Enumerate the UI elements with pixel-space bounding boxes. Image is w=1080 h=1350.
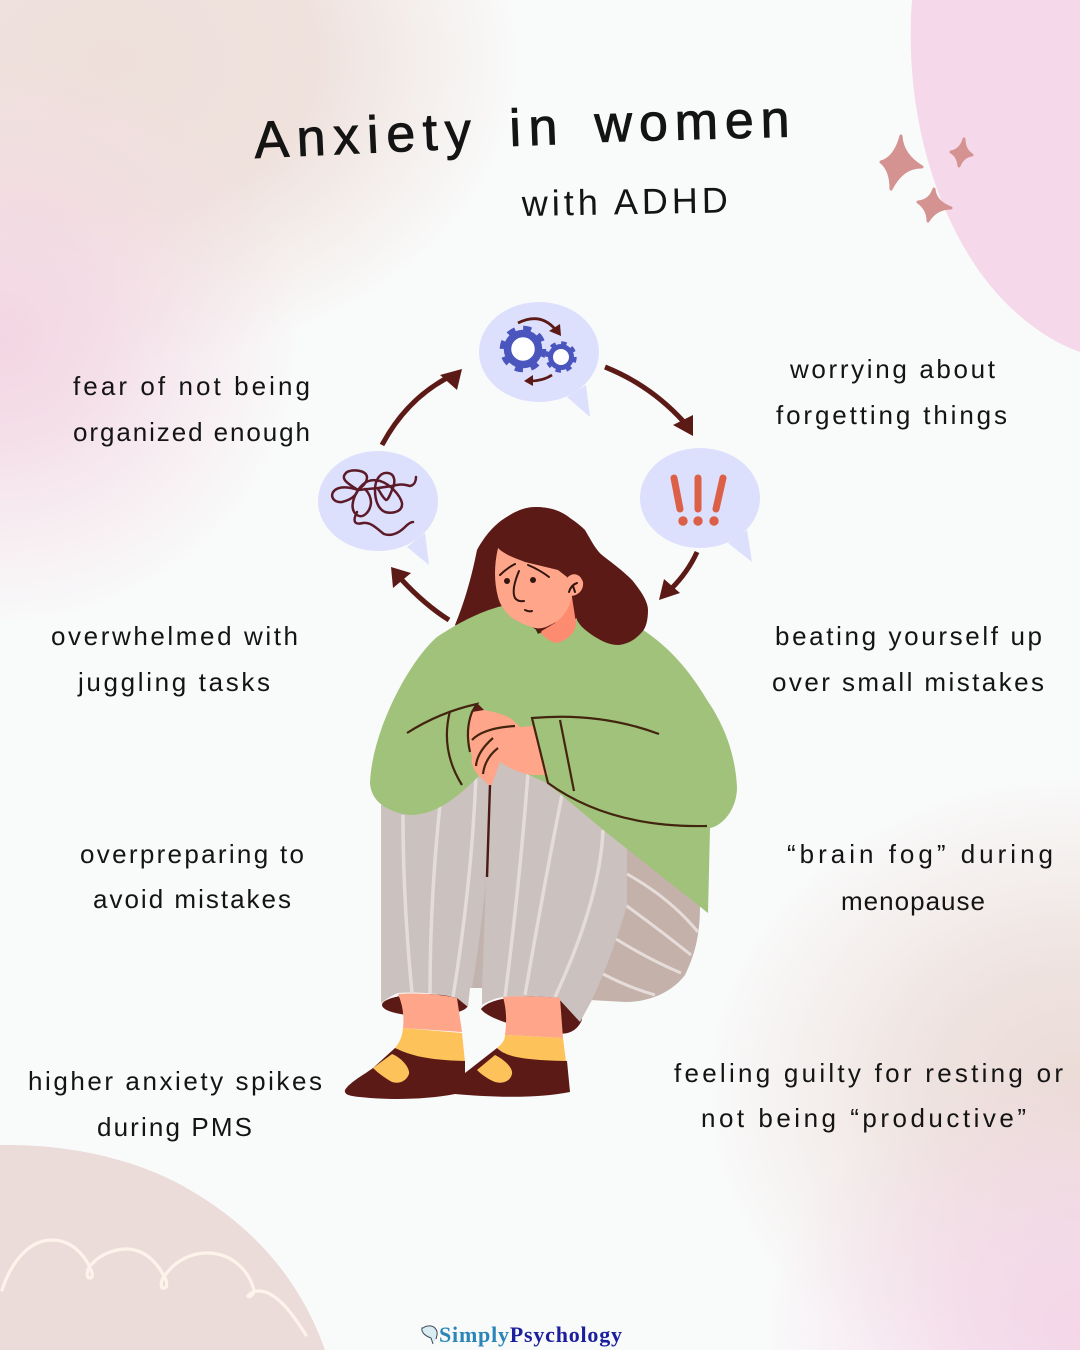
- icon: head: [422, 1326, 437, 1344]
- text: higher anxiety spikes: during PMS: [97, 1112, 252, 1142]
- text: higher anxiety spikes: [28, 1066, 322, 1142]
- bubble: tangled thoughts: [318, 451, 438, 565]
- icon: gears: [502, 319, 575, 386]
- text: fear of not being organized: fear of not being: [73, 371, 310, 401]
- socks: [395, 1028, 465, 1062]
- title: women: [593, 91, 790, 154]
- chin shadow: [535, 628, 542, 634]
- text: overwhelmed with juggling: overwhelmed with: [51, 621, 298, 651]
- text: beating yourself up: over small mistakes: [772, 667, 1044, 697]
- arrow: top to right: [605, 367, 693, 436]
- text: overpreparing: avoid mistakes: [93, 884, 291, 914]
- text: overpreparing: [80, 839, 304, 914]
- icon: sparkles: [881, 136, 972, 221]
- text: overwhelmed with juggling: juggling tasks: [77, 667, 270, 697]
- text: worrying about forgetting: forgetting things: [776, 400, 1007, 430]
- text: feeling guilty: feeling guilty for resting or: [674, 1058, 1063, 1088]
- arrows: cycle: [382, 367, 697, 620]
- text: beating yourself up: beating yourself up: [775, 621, 1042, 651]
- eye: right: [530, 577, 536, 583]
- title: in: [508, 98, 558, 158]
- trousers: [381, 760, 627, 1022]
- decorative shape: bottom left blob: [0, 1145, 325, 1350]
- text: beating yourself up: [772, 621, 1044, 697]
- text: brain fog: menopause: [841, 886, 985, 916]
- bubble: gears: [479, 302, 599, 417]
- logo: Simply Psychology: SimplyPsychology: [439, 1322, 622, 1347]
- arrow: right to head: [659, 552, 697, 600]
- shoes: [345, 1048, 570, 1099]
- seat stripes: [603, 874, 698, 995]
- arrow: head to left: [391, 567, 449, 620]
- cuff backs: [382, 994, 468, 1016]
- arrow: left to top: [382, 369, 462, 445]
- legs: skin: [398, 994, 462, 1032]
- hands: [468, 710, 548, 787]
- knee line: [487, 785, 490, 877]
- text: brain fog: [787, 839, 1053, 916]
- text: feeling guilty: [674, 1058, 1063, 1133]
- title: Anxiety: [253, 102, 472, 170]
- text: worrying about forgetting: [776, 354, 1007, 430]
- text: fear of not being organized: organized enough: [73, 417, 310, 447]
- text: brain fog: “brain fog” during: [787, 839, 1053, 869]
- text: worrying about forgetting: worrying about: [789, 354, 996, 384]
- text: fear of not being organized: [73, 371, 310, 447]
- ponytail: [535, 507, 648, 645]
- face: [495, 548, 572, 628]
- neck: [540, 597, 576, 643]
- seat: [590, 848, 700, 1002]
- title: [253, 91, 790, 224]
- sweater lines: [407, 704, 707, 826]
- title: with ADHD: [520, 179, 728, 224]
- trouser stripes: [403, 773, 603, 997]
- eye: left: [504, 578, 510, 584]
- decorative cloud line: [2, 1240, 306, 1335]
- icon: exclamation marks: [674, 478, 723, 523]
- face details: [500, 564, 577, 611]
- ear: [567, 574, 583, 596]
- illustration: seated woman: [345, 507, 737, 1099]
- trouser shadow: [472, 880, 486, 988]
- text: feeling guilty: not being “productive”: [701, 1103, 1026, 1133]
- bubble: exclamation marks: [640, 448, 760, 562]
- text: overpreparing: overpreparing to: [80, 839, 304, 869]
- icon: tangled scribble: [332, 470, 416, 535]
- text: overwhelmed with juggling: [51, 621, 298, 697]
- hair back: [455, 507, 580, 640]
- text: higher anxiety spikes: higher anxiety spikes: [28, 1066, 322, 1096]
- sweater: [370, 606, 737, 913]
- decorative shape: top right blob: [911, 0, 1080, 352]
